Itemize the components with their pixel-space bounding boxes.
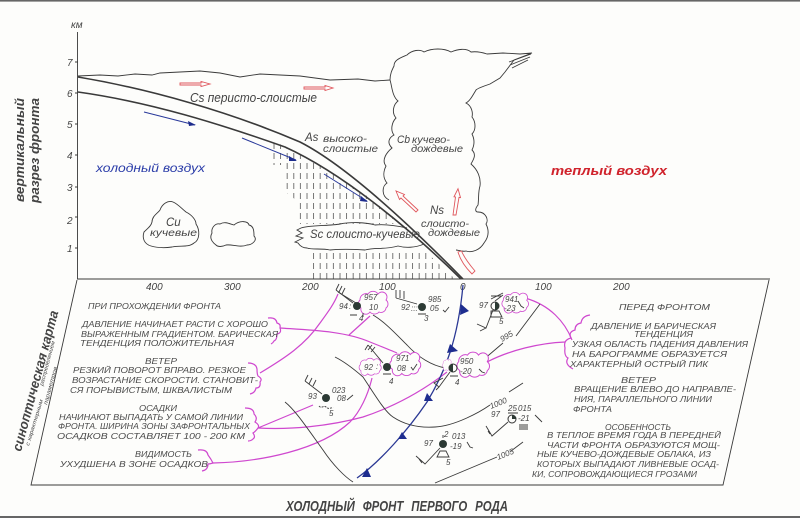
distance axis labels: 200 — [301, 282, 319, 293]
height axis: 5 — [67, 120, 73, 131]
cloud labels: Cu — [166, 217, 181, 229]
heading: vertical cross-section label: вертикальный — [12, 98, 27, 202]
cumulonimbus and nimbostratus cloud outline — [383, 49, 532, 252]
magenta connector lines — [213, 294, 572, 463]
station: 97 / 013: 2 — [443, 430, 449, 439]
station: 950 on the front: 950 — [460, 357, 474, 366]
heading: vertical cross-section label — [12, 98, 42, 204]
text block: conditions ahead of the front: КОТОРЫХ ВЫПАДАЮТ ЛИВНЕВЫЕ ОСАД- — [537, 459, 719, 469]
text block: conditions during front passage: ВЫРАЖЕННЫМ ГРАДИЕНТОМ. БАРИЧЕСКАЯ — [81, 329, 278, 339]
hatching: precipitation zone — [268, 139, 455, 279]
text block: conditions during front passage: УХУДШЕНА В ЗОНЕ ОСАДКОВ — [59, 459, 208, 469]
text block: conditions during front passage: ВЕТЕР — [145, 356, 177, 366]
station: 92 / 985: 985 — [428, 295, 442, 304]
distance axis labels: 100 — [379, 282, 396, 293]
distance axis labels: 100 — [535, 282, 552, 293]
cirrostratus top edge — [78, 71, 390, 81]
station: 94 / 957: 94 — [339, 302, 348, 311]
isobars: 995 — [498, 329, 515, 344]
height axis: 2 — [66, 216, 73, 227]
text block: conditions ahead of the front: ВРАЩЕНИЕ ВЛЕВО ДО НАПРАВЛЕ- — [574, 384, 736, 394]
station: 94 / 957: 957 — [364, 293, 378, 302]
station: 93 / 023 — [305, 375, 353, 418]
height axis: км — [71, 20, 83, 31]
cloud labels: Ns — [430, 205, 444, 217]
text block: conditions ahead of the front: НИЯ, ПАРАЛЛЕЛЬНОГО ЛИНИИ — [574, 394, 713, 404]
station: 97 / 015: 015 — [518, 404, 532, 413]
text block: conditions during front passage: ВОЗРАСТАНИЕ СКОРОСТИ. СТАНОВИТ- — [72, 375, 258, 385]
cumulus cloud small — [211, 222, 255, 246]
cold air label: холодный воздух — [95, 161, 206, 175]
text block: conditions ahead of the front: ДАВЛЕНИЕ И БАРИЧЕСКАЯ — [590, 321, 716, 331]
text block: conditions ahead of the front — [532, 302, 748, 479]
cloud labels: Cb — [397, 134, 410, 146]
station: 97 / 015: 97 — [491, 410, 500, 419]
text block: conditions during front passage: СЯ ПОРЫВИСТЫМ, ШКВАЛИСТЫМ — [70, 385, 233, 395]
cloud labels: слоистые — [323, 143, 378, 155]
distance axis labels: 0 — [460, 282, 466, 293]
station: 92 / 971: 4 — [389, 377, 394, 386]
height axis: 7 — [67, 58, 73, 69]
panel: synoptic map frame — [31, 280, 769, 485]
station: 92 / 971: 92 — [364, 363, 373, 372]
station: 97 / 015: -21 — [518, 414, 530, 423]
text block: conditions during front passage: ВИДИМОСТЬ — [135, 449, 192, 459]
station: 97 / 013: 97 — [424, 439, 433, 448]
station: 950 on the front — [434, 357, 485, 390]
text block: conditions during front passage: ОСАДКИ — [139, 403, 178, 413]
height axis: 4 — [67, 151, 73, 162]
text block: conditions during front passage: ОСАДКОВ СОСТАВЛЯЕТ 100 - 200 КМ — [57, 431, 246, 441]
distance axis labels: 200 — [612, 282, 630, 293]
text block: conditions ahead of the front: ПЕРЕД ФРОНТОМ — [619, 302, 711, 312]
frontal surface — [78, 77, 463, 279]
cloud labels: As — [304, 132, 319, 144]
height axis: 3 — [67, 183, 73, 194]
station: 94 / 957: 4 — [359, 314, 364, 323]
station: 97 / 941: -23 — [504, 304, 516, 313]
station: 92 / 985: ::: — [411, 304, 418, 313]
heading: vertical cross-section label: разрез фронта — [27, 98, 42, 204]
station: 97 / 015: 25 — [507, 404, 517, 413]
station: 97 / 015 — [486, 404, 542, 436]
text block: conditions during front passage: ФРОНТА. ШИРИНА ЗОНЫ ЗАФРОНТАЛЬНЫХ — [58, 421, 250, 431]
cloud labels: кучево- — [412, 134, 451, 146]
warm air label: теплый воздух — [551, 163, 668, 178]
station: 97 / 941: 97 — [479, 301, 488, 310]
station: 94 / 957: 10 — [369, 303, 378, 312]
title: ХОЛОДНЫЙ ФРОНТ ПЕРВОГО РОДА — [285, 497, 508, 515]
stratocumulus cloud — [295, 223, 424, 250]
text block: conditions ahead of the front: ТЕНДЕНЦИЯ — [634, 329, 693, 339]
height axis — [66, 20, 83, 279]
text block: conditions ahead of the front: ОСОБЕННОСТЬ — [605, 422, 671, 432]
magenta braces — [198, 315, 590, 471]
station: 950 on the front: 4 — [455, 378, 460, 387]
cloud labels: высоко- — [323, 133, 368, 145]
station: 92 / 971: : — [376, 362, 378, 371]
text block: conditions during front passage: ДАВЛЕНИЕ НАЧИНАЕТ РАСТИ С ХОРОШО — [81, 319, 268, 329]
cloud labels: Sc слоисто-кучевые — [310, 229, 420, 241]
cloud labels: слоисто- — [421, 218, 470, 230]
text block: conditions ahead of the front: КИ, СОПРОВОЖДАЮЩИЕСЯ ГРОЗАМИ — [532, 469, 698, 479]
station: 92 / 971: 08 — [397, 364, 406, 373]
station: 97 / 941: 941 — [505, 295, 518, 304]
station: 92 / 971: 971 — [396, 354, 409, 363]
heading: synoptic map label: параметров — [43, 366, 59, 406]
station: 97 / 941: 5 — [499, 317, 504, 326]
text block: conditions ahead of the front: НЫЕ КУЧЕВО-ДОЖДЕВЫЕ ОБЛАКА, ИЗ — [537, 449, 712, 459]
red arrows: warm air flow — [180, 82, 475, 274]
station: 94 / 957 — [336, 284, 378, 323]
distance axis labels: 400 — [146, 282, 163, 293]
height axis: 6 — [67, 89, 73, 100]
isobars — [285, 292, 540, 483]
distance axis labels — [146, 282, 630, 293]
cold front line with triangles — [357, 285, 469, 478]
text block: conditions ahead of the front: В ТЕПЛОЕ ВРЕМЯ ГОДА В ПЕРЕДНЕЙ — [547, 429, 722, 440]
station: 97 / 013: 5 — [446, 458, 451, 467]
isobars: 1000 — [488, 396, 509, 411]
station: 92 / 971 — [364, 345, 417, 386]
station: 97 / 013: 013 — [452, 432, 466, 441]
blue arrows: cold air flow — [144, 112, 368, 202]
cloud labels: кучевые — [150, 227, 197, 239]
text block: conditions ahead of the front: НА БАРОГРАММЕ ОБРАЗУЕТСЯ — [572, 349, 727, 359]
station: 97 / 013: -19 — [450, 442, 462, 451]
text block: conditions during front passage: ТЕНДЕНЦИЯ ПОЛОЖИТЕЛЬНАЯ — [80, 338, 234, 348]
station: 97 / 013 — [416, 430, 473, 467]
cumulus cloud large — [143, 201, 199, 248]
text block: conditions during front passage — [57, 301, 278, 469]
station: 93 / 023: 023 — [332, 386, 346, 395]
text block: conditions ahead of the front: ФРОНТА — [573, 404, 612, 414]
station: 93 / 023: 93 — [308, 392, 317, 401]
text block: conditions ahead of the front: ХАРАКТЕРНЫЙ ОСТРЫЙ ПИК — [569, 358, 709, 369]
panel: vertical cross-section of the front — [66, 20, 770, 293]
station bubbles — [358, 291, 528, 377]
distance axis labels: 300 — [224, 282, 241, 293]
station: 92 / 985: 3 — [424, 314, 429, 323]
baseline of cross-section — [77, 278, 770, 280]
station: 950 on the front: -20 — [460, 367, 472, 376]
heading: synoptic map label: с характерным — [25, 399, 45, 447]
text block: conditions ahead of the front: ВЕТЕР — [621, 375, 656, 385]
isobars: 1005 — [495, 447, 516, 462]
station: 92 / 985 — [396, 290, 449, 323]
text block: conditions during front passage: ПРИ ПРОХОЖДЕНИИ ФРОНТА — [88, 301, 221, 311]
station: 92 / 985: 92 — [401, 303, 410, 312]
text block: conditions ahead of the front: ЧАСТИ ФРОНТА ОБРАЗУЮТСЯ МОЩ- — [547, 440, 720, 450]
station: 94 / 957: : — [349, 302, 351, 311]
heading: synoptic map label: синоптическая карта — [9, 308, 62, 453]
heading: synoptic map label: распределением — [39, 340, 57, 388]
cloud labels: Cs перисто-слоистые — [190, 91, 317, 105]
text block: conditions during front passage: РЕЗКИЙ ПОВОРОТ ВПРАВО. РЕЗКОЕ — [73, 364, 246, 375]
station: 92 / 985: 05 — [430, 304, 439, 313]
station: 93 / 023: 08 — [337, 394, 346, 403]
text block: conditions ahead of the front: УЗКАЯ ОБЛАСТЬ ПАДЕНИЯ ДАВЛЕНИЯ — [571, 339, 748, 349]
height axis: 1 — [67, 244, 73, 255]
cloud labels: дождевые — [411, 143, 463, 155]
station: 97 / 941 — [477, 293, 524, 331]
anvil streaks — [509, 54, 531, 68]
text block: conditions during front passage: НАЧИНАЮТ ВЫПАДАТЬ У САМОЙ ЛИНИИ — [59, 411, 244, 422]
cloud labels — [150, 91, 480, 241]
cloud labels: дождевые — [428, 227, 480, 239]
station: 93 / 023: 5 — [329, 409, 334, 418]
